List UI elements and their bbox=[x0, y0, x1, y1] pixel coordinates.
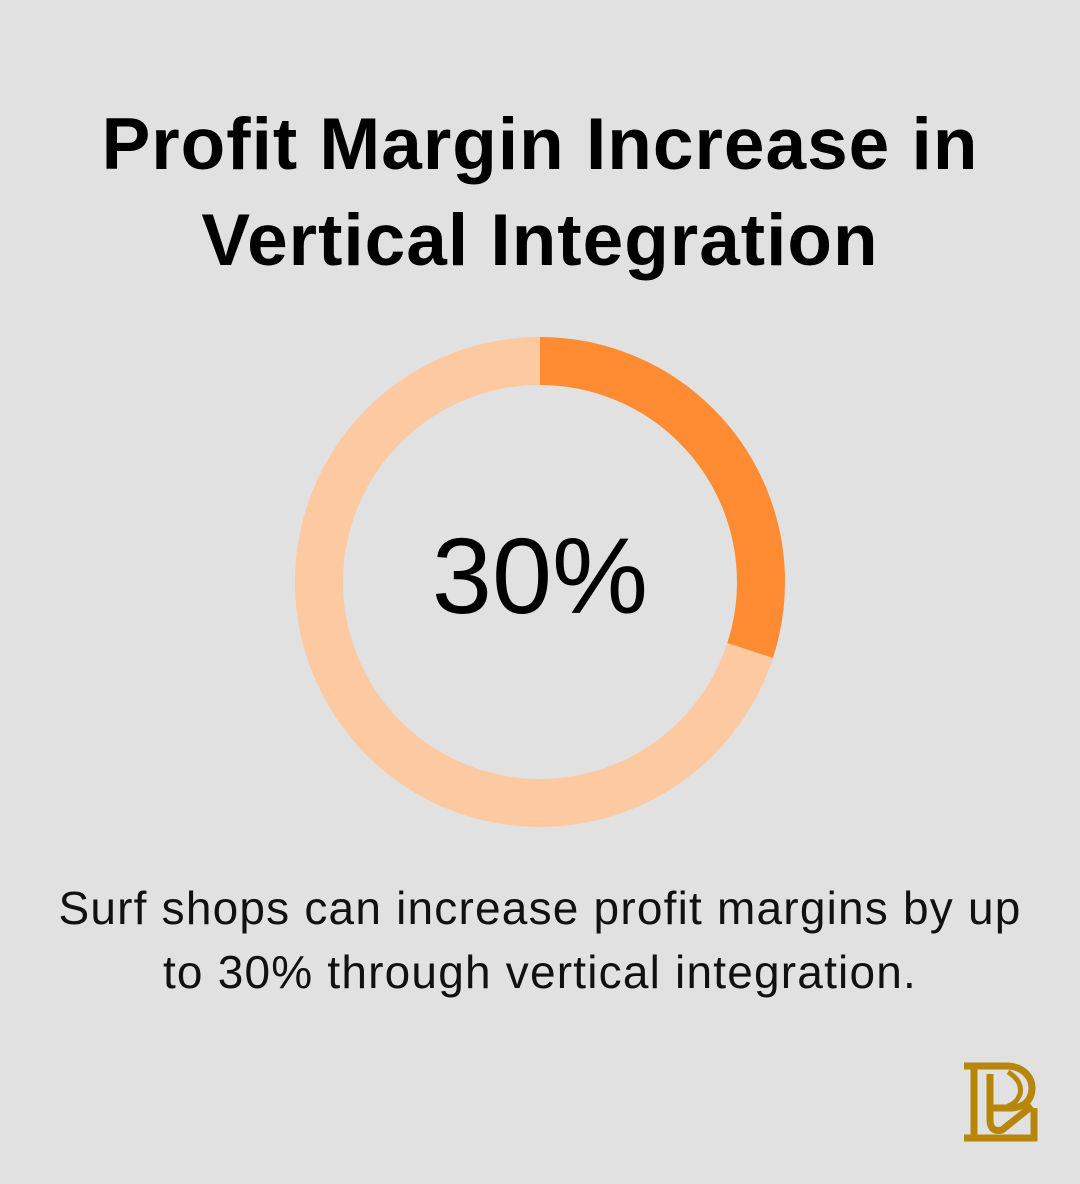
donut chart: 30% bbox=[432, 515, 648, 636]
icon: logo bbox=[964, 1062, 1038, 1142]
description text bbox=[58, 882, 1022, 998]
description text: to 30% through vertical integration. bbox=[163, 946, 917, 998]
title bbox=[102, 104, 978, 281]
title: Profit Margin Increase in bbox=[102, 104, 978, 185]
title: Vertical Integration bbox=[201, 200, 879, 281]
description text: Surf shops can increase profit margins by up bbox=[58, 882, 1022, 934]
